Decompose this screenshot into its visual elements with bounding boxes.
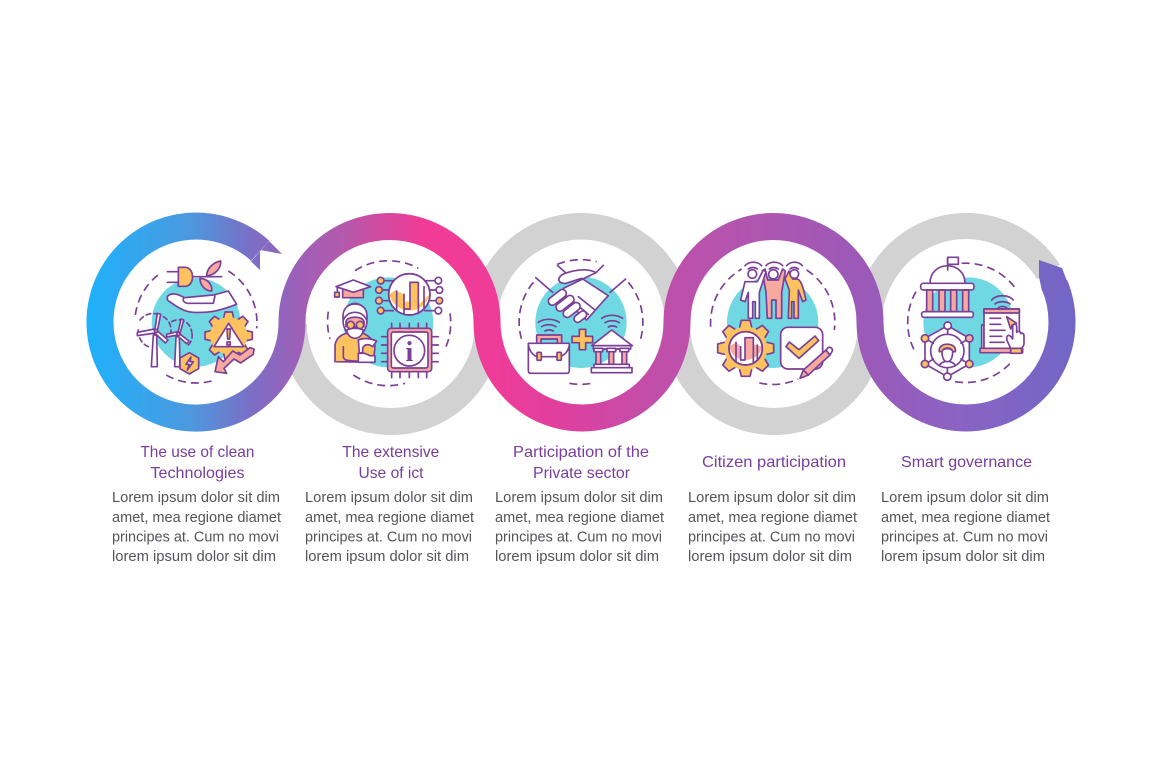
step 3 text: Private sector xyxy=(533,465,631,482)
step 2 text xyxy=(305,444,475,565)
step 1 text xyxy=(112,444,282,565)
step 3 text: lorem ipsum dolor sit dim xyxy=(495,548,659,565)
step 3 text: Participation of the xyxy=(513,444,649,461)
step 1 text: Lorem ipsum dolor sit dim xyxy=(112,489,280,506)
step 5 text: principes at. Cum no movi xyxy=(881,528,1048,546)
step 4 text: Citizen participation xyxy=(702,454,846,471)
step 5 text xyxy=(881,454,1051,565)
step 1 text: principes at. Cum no movi xyxy=(112,528,279,546)
step 5 text: amet, mea regione diamet xyxy=(881,509,1051,526)
step 4 text xyxy=(688,454,858,565)
step 1 text: amet, mea regione diamet xyxy=(112,509,282,526)
icon: use of ICT: i xyxy=(405,337,413,368)
step 2 text: The extensive xyxy=(342,444,439,461)
step 4 text: Lorem ipsum dolor sit dim xyxy=(688,489,856,506)
white step discs xyxy=(113,239,1049,407)
step 2 text: lorem ipsum dolor sit dim xyxy=(305,548,469,565)
icon: smart governance xyxy=(908,257,1024,383)
step 1 text: Technologies xyxy=(150,465,244,482)
step 2 text: principes at. Cum no movi xyxy=(305,528,472,546)
step 4 text: amet, mea regione diamet xyxy=(688,509,858,526)
step 3 text: Lorem ipsum dolor sit dim xyxy=(495,489,663,506)
step 3 text: principes at. Cum no movi xyxy=(495,528,662,546)
step 3 text xyxy=(495,444,665,565)
step 4 text: principes at. Cum no movi xyxy=(688,528,855,546)
step 5 text: lorem ipsum dolor sit dim xyxy=(881,548,1045,565)
icon: citizen participation xyxy=(711,262,835,384)
grey background rings xyxy=(294,226,1048,422)
gradient ribbon with arrow ends xyxy=(100,226,1067,418)
icon: use of ICT xyxy=(328,261,451,386)
step 5 text: Smart governance xyxy=(901,454,1032,471)
icon: private sector participation xyxy=(519,260,643,384)
step 2 text: amet, mea regione diamet xyxy=(305,509,475,526)
icon: clean technologies xyxy=(135,261,257,383)
step 5 text: Lorem ipsum dolor sit dim xyxy=(881,489,1049,506)
step 3 text: amet, mea regione diamet xyxy=(495,509,665,526)
step 1 text: lorem ipsum dolor sit dim xyxy=(112,548,276,565)
step 4 text: lorem ipsum dolor sit dim xyxy=(688,548,852,565)
step 2 text: Use of ict xyxy=(358,465,424,482)
step 1 text: The use of clean xyxy=(140,444,254,461)
step 2 text: Lorem ipsum dolor sit dim xyxy=(305,489,473,506)
